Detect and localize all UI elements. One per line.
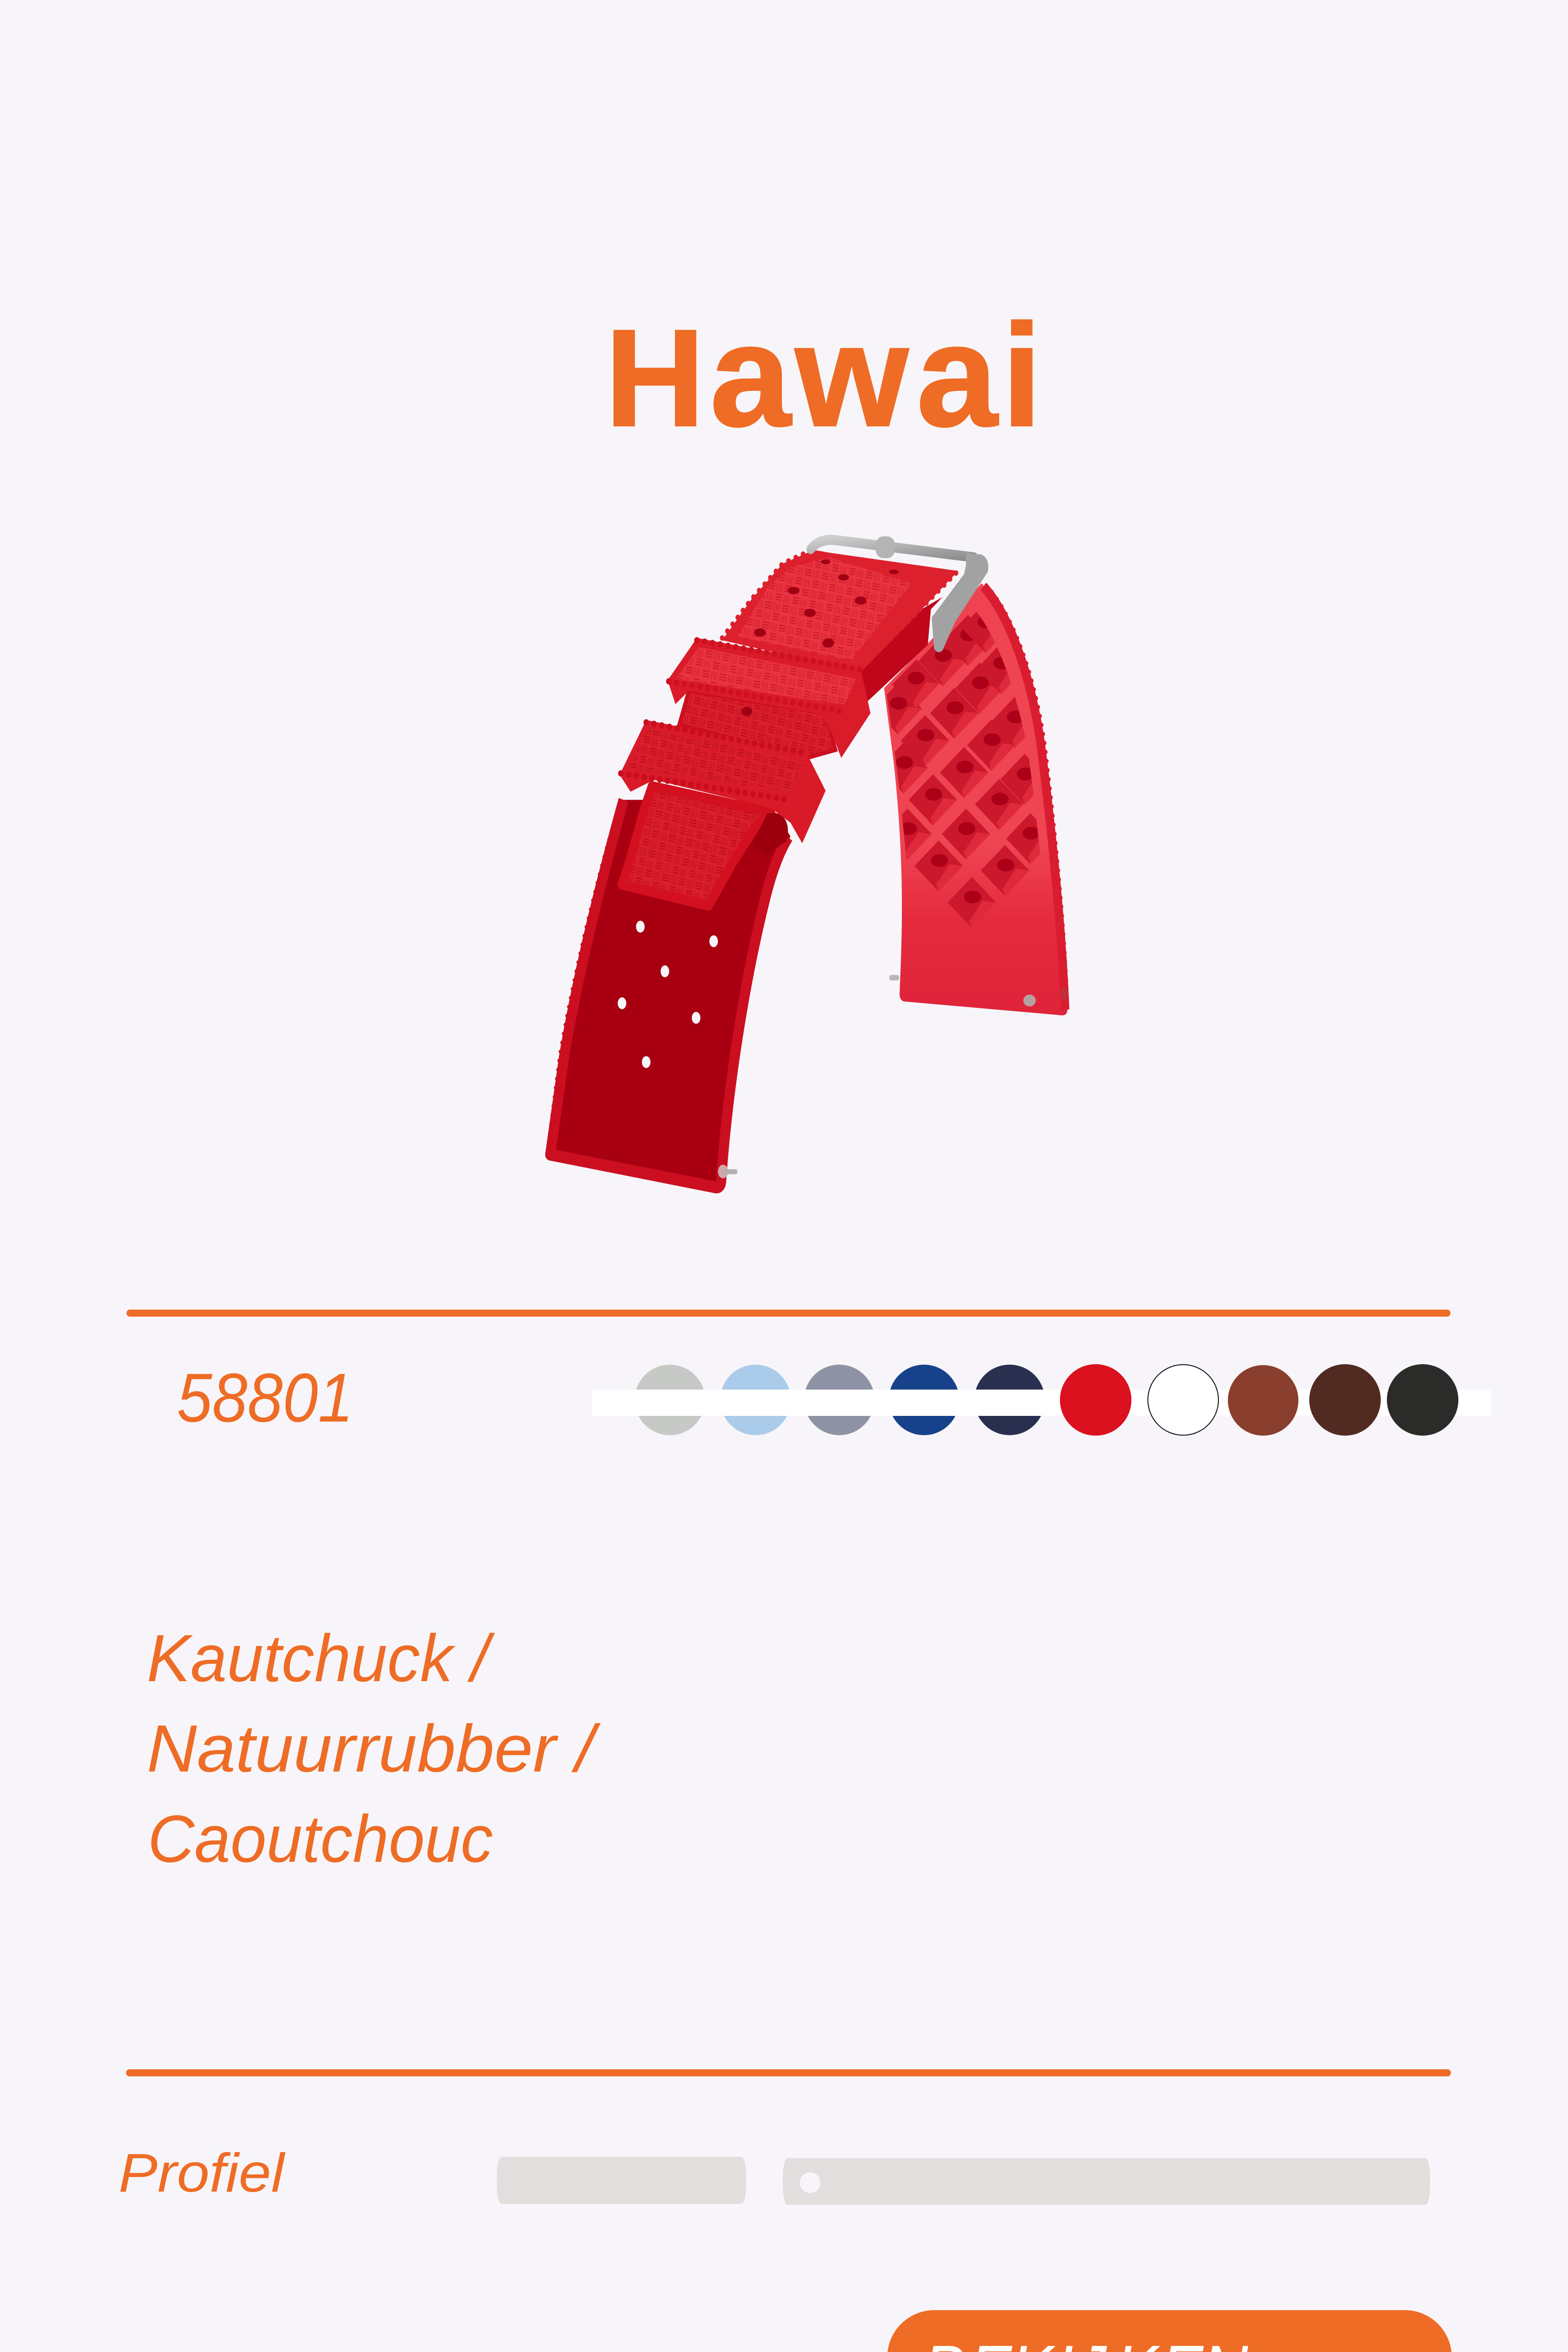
divider line: bottom — [126, 2069, 1451, 2076]
swatches: above the band — [1060, 1364, 1458, 1436]
keeper: upper loop — [668, 638, 870, 758]
title: awai — [710, 294, 1042, 457]
material text — [147, 1621, 601, 1876]
profile: short strap piece — [497, 2157, 746, 2204]
strap: back section with diamond pattern — [874, 583, 1068, 1015]
divider line: top — [127, 1310, 1450, 1317]
strap: section between keepers — [679, 691, 836, 758]
keeper: lower loop — [620, 720, 826, 843]
holes — [618, 921, 718, 1068]
product image: red rubber watch strap — [548, 536, 1068, 1191]
article number: 58801 — [177, 1359, 353, 1437]
profile: long strap piece — [783, 2158, 1430, 2205]
material text: Kautchuck / — [147, 1621, 495, 1696]
material text: Caoutchouc — [148, 1802, 493, 1876]
strap hole: between keepers — [741, 707, 752, 716]
white band — [592, 1390, 1491, 1416]
strap: pointed tip — [622, 786, 788, 906]
spring bar pins — [889, 975, 1068, 1007]
swatches: behind the band — [635, 1365, 1045, 1435]
button — [887, 2310, 1452, 2352]
strap holes — [754, 560, 899, 648]
strap: top section with weave — [722, 549, 958, 672]
material text: Natuurrubber / — [147, 1711, 601, 1786]
strap: long front section — [548, 800, 790, 1191]
pin — [718, 1165, 738, 1178]
buckle — [811, 536, 988, 652]
title: H — [605, 301, 705, 455]
profile diagram — [497, 2157, 1430, 2205]
profile: hole — [800, 2172, 820, 2193]
profile label: Profiel — [119, 2142, 286, 2203]
colour swatches — [592, 1364, 1491, 1436]
strap: underside near buckle — [853, 597, 943, 709]
